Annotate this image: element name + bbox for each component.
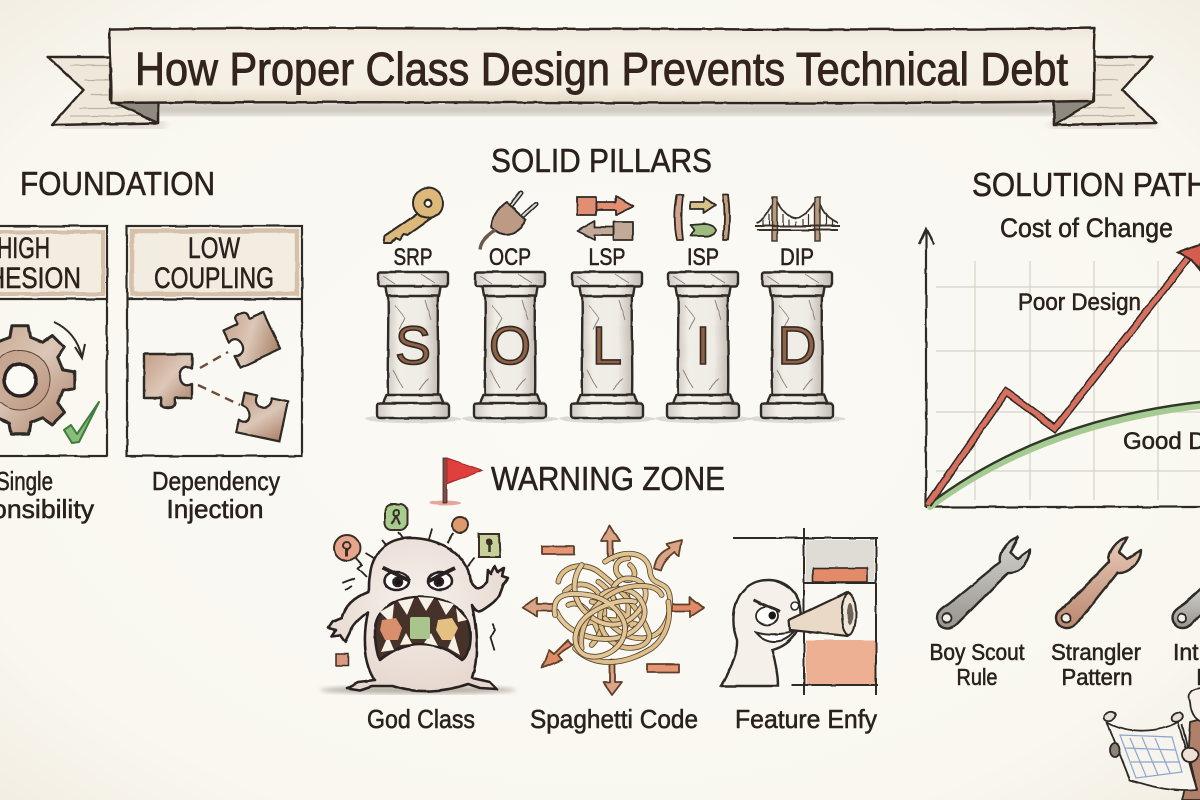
connectors: dashed — [198, 352, 240, 405]
label: dependency injection: Dependency — [152, 466, 280, 496]
label: third tool — [1173, 639, 1200, 690]
card: low coupling: COUPLING — [154, 262, 274, 295]
floating icons — [334, 504, 500, 666]
icon: check mark — [64, 402, 99, 443]
ground line — [15, 769, 1110, 771]
icon: bridge — [755, 197, 840, 241]
label: spaghetti code: Spaghetti Code — [530, 704, 698, 734]
icon: plug — [480, 193, 536, 250]
illustration: spaghetti code — [522, 525, 704, 695]
pillar: D — [749, 272, 845, 423]
label: dependency injection: Injection — [166, 494, 264, 524]
labels: principles — [394, 244, 814, 271]
panel: solid pillars — [365, 142, 845, 423]
illustration: god class monster — [320, 504, 516, 694]
swallowed classes — [380, 618, 402, 640]
eyes — [385, 572, 409, 590]
pillar: S: S — [395, 316, 431, 376]
arrows radiating — [522, 525, 704, 695]
pillar: I: I — [695, 316, 711, 376]
line: good design — [928, 402, 1200, 507]
icon: red flag — [429, 458, 482, 506]
label: strangler pattern: Pattern — [1062, 664, 1132, 690]
chart title: Cost of Change — [1000, 213, 1173, 243]
icon: key — [384, 188, 443, 243]
title banner — [48, 28, 1156, 128]
antennae — [342, 529, 495, 650]
labels: principles: DIP — [780, 244, 814, 271]
title: How Proper Class Design Prevents Technical Debt — [135, 43, 1068, 95]
arrow: rotation — [54, 322, 85, 358]
teeth — [380, 597, 467, 655]
label: strangler pattern — [1051, 639, 1141, 690]
label: strangler pattern: Strangler — [1051, 639, 1141, 665]
pillar: I — [655, 272, 751, 423]
pillar: D: D — [778, 316, 816, 376]
label: third tool: Int — [1173, 639, 1199, 665]
labels: principles: LSP — [588, 244, 626, 271]
card: low coupling — [127, 226, 302, 524]
icon: wrench steel — [937, 537, 1030, 628]
panel: foundation — [0, 165, 302, 524]
heading: foundation: FOUNDATION — [20, 165, 215, 202]
pillar: O: O — [489, 316, 531, 376]
label: poor design: Poor Design — [1018, 289, 1141, 316]
icon: gear — [0, 326, 74, 434]
illustration: feature envy — [721, 528, 878, 695]
icon: wrench copper — [1056, 537, 1141, 628]
panel: warning zone — [320, 458, 878, 734]
heading: warning zone: WARNING ZONE — [491, 460, 725, 497]
label: god class: God Class — [367, 704, 475, 734]
illustration: architect with blueprint — [1103, 688, 1200, 800]
pillar: L: L — [592, 316, 622, 376]
icon: puzzle pieces — [144, 304, 288, 441]
label: dependency injection — [152, 466, 280, 524]
label: boy scout rule: Boy Scout — [930, 639, 1025, 665]
icon: substitution arrows — [577, 196, 634, 240]
heading: solid pillars: SOLID PILLARS — [491, 142, 712, 179]
labels: principles: OCP — [489, 244, 531, 271]
axes — [919, 229, 1200, 507]
icon: wrench partial — [1172, 585, 1200, 628]
noodle knot — [554, 554, 670, 662]
pillar: L — [559, 272, 655, 423]
mouth — [375, 597, 470, 660]
panel: solution path — [919, 166, 1200, 800]
labels: principles: ISP — [687, 244, 719, 271]
icon: interface segregation — [675, 195, 730, 240]
label: boy scout rule: Rule — [956, 664, 998, 690]
labels: principles: SRP — [394, 244, 432, 271]
card: high cohesion — [0, 226, 107, 524]
chart: cost of change — [919, 213, 1200, 507]
line: poor design — [928, 243, 1200, 505]
pillar: O — [462, 272, 558, 423]
label: feature envy: Feature Enfy — [735, 704, 877, 734]
label: boy scout rule — [930, 639, 1025, 690]
card: low coupling: LOW — [188, 232, 241, 265]
label: single responsibility — [0, 466, 94, 524]
pillar: S — [365, 272, 461, 423]
